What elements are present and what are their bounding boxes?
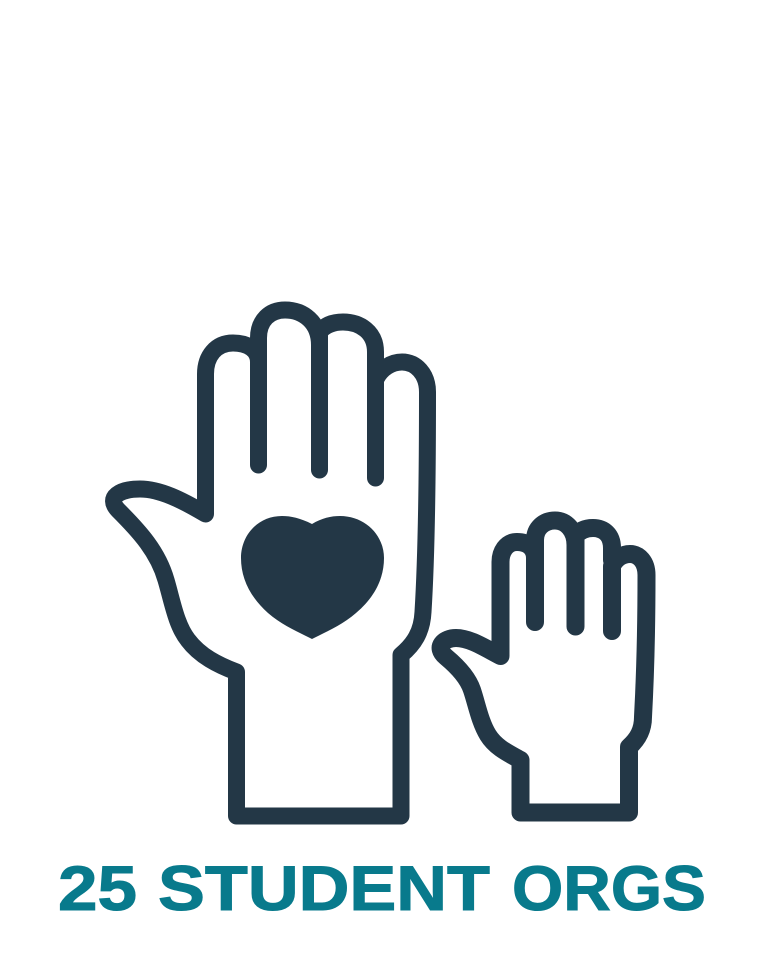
title: 25 student orgs (58, 854, 706, 924)
large hand outline (114, 310, 427, 816)
title: 25 student orgs: ORGS (512, 854, 706, 924)
title: 25 student orgs: STUDENT (158, 854, 490, 924)
title: 25 student orgs: 25 (58, 854, 137, 924)
icon: heart (241, 516, 384, 639)
icon: raised hands (114, 310, 647, 816)
small hand outline (441, 520, 646, 812)
